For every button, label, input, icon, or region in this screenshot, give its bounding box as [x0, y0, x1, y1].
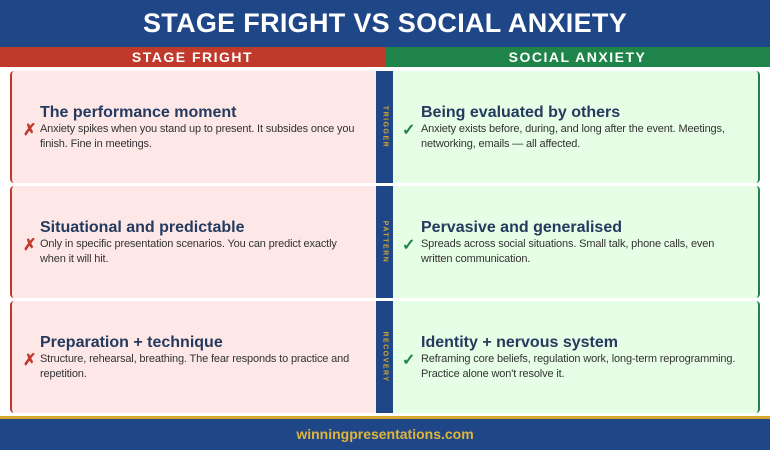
panel: stage fright trigger: The performance moment [40, 104, 236, 121]
title: STAGE FRIGHT VS SOCIAL ANXIETY [143, 8, 627, 38]
label: trigger [376, 71, 394, 183]
panel: social anxiety pattern [393, 186, 760, 298]
label: trigger: TRIGGER [382, 106, 388, 148]
panel: stage fright trigger: Anxiety spikes when you stand up to present. It subsides once you finish. Fine in meetings. [40, 123, 354, 150]
panel: social anxiety recovery: Reframing core beliefs, regulation work, long-term reprogramming. Practice alone won't resolve it. [421, 353, 735, 380]
panel: stage fright recovery: Structure, rehearsal, breathing. The fear responds to practice and repetition. [40, 353, 349, 380]
header: stage fright: STAGE FRIGHT [132, 49, 253, 65]
panel: social anxiety trigger: Being evaluated by others [421, 104, 620, 121]
title [0, 0, 770, 47]
panel: stage fright recovery: Preparation + technique [40, 334, 223, 351]
label: pattern [376, 186, 394, 298]
panel: stage fright recovery: ✗ [23, 352, 36, 369]
label: recovery: RECOVERY [382, 331, 388, 383]
header: stage fright [0, 47, 385, 67]
panel: social anxiety trigger [393, 71, 760, 183]
panel: stage fright trigger [10, 71, 377, 183]
panel: social anxiety pattern: ✓ [402, 237, 415, 254]
panel: social anxiety trigger: Anxiety exists before, during, and long after the event. Meetings, networking, emails — all affected. [421, 123, 725, 150]
panel: stage fright trigger: ✗ [23, 122, 36, 139]
panel: social anxiety trigger: ✓ [402, 122, 415, 139]
footer: winningpresentations.com [296, 426, 474, 442]
header: social anxiety: SOCIAL ANXIETY [509, 49, 646, 65]
panel: social anxiety recovery: Identity + nervous system [421, 334, 618, 351]
label: recovery [376, 301, 394, 413]
panel: stage fright pattern: Situational and predictable [40, 219, 244, 236]
header: social anxiety [385, 47, 770, 67]
panel: social anxiety recovery: ✓ [402, 352, 415, 369]
panel: stage fright pattern: ✗ [23, 237, 36, 254]
panel: social anxiety recovery [393, 301, 760, 413]
footer [0, 416, 770, 450]
panel: stage fright pattern [10, 186, 377, 298]
panel: social anxiety pattern: Pervasive and generalised [421, 219, 622, 236]
panel: stage fright pattern: Only in specific presentation scenarios. You can predict exactly when it will hit. [40, 238, 337, 265]
panel: social anxiety pattern: Spreads across social situations. Small talk, phone calls, even written communication. [421, 238, 714, 265]
label: pattern: PATTERN [382, 221, 388, 263]
panel: stage fright recovery [10, 301, 377, 413]
